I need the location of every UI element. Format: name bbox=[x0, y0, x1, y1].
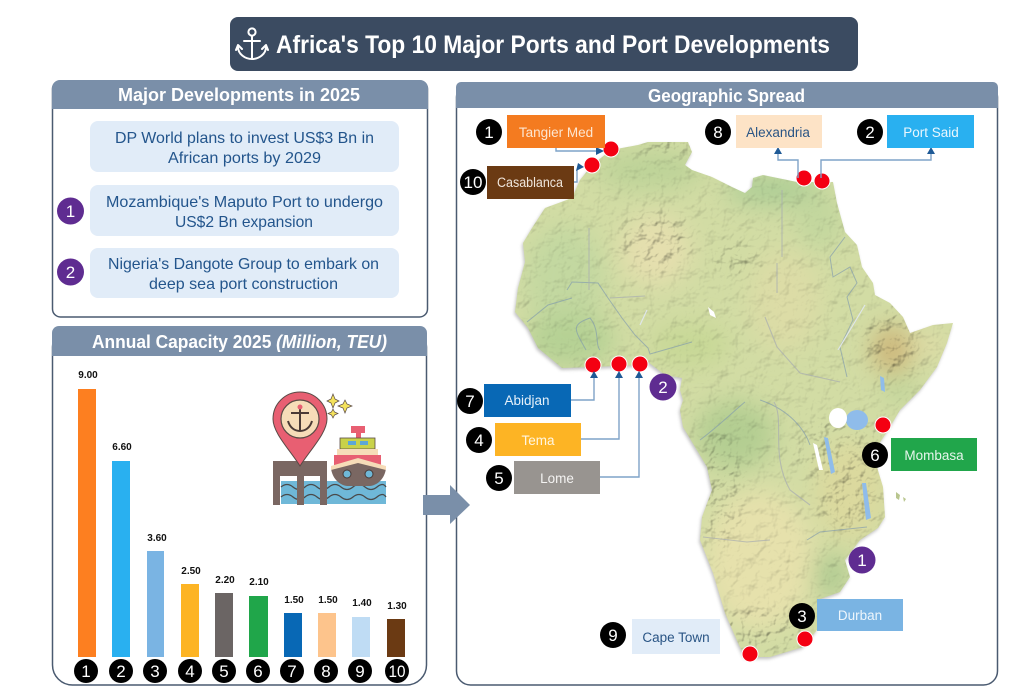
label: Port Said: 2 bbox=[865, 123, 875, 142]
panel: annual capacity bbox=[52, 326, 427, 685]
bar chart: 7 bbox=[287, 662, 297, 681]
bar chart: 2.10 bbox=[249, 577, 269, 588]
label: Abidjan: Abidjan bbox=[504, 393, 550, 408]
label: Alexandria: 8 bbox=[713, 123, 723, 142]
development marker 2: 2 bbox=[658, 378, 668, 397]
label: Port Said bbox=[857, 115, 974, 148]
bar chart: 8 bbox=[321, 662, 331, 681]
panel: geographic spread bbox=[456, 82, 998, 685]
development: Dangote: deep sea port construction bbox=[149, 276, 338, 293]
panel: annual capacity: Annual Capacity 2025 (Million, TEU) bbox=[92, 332, 387, 352]
bar chart: 4 bbox=[185, 662, 195, 681]
label: Alexandria bbox=[705, 115, 822, 148]
panel: major developments bbox=[52, 80, 428, 317]
bar chart: 5 bbox=[219, 662, 229, 681]
label: Tangier Med bbox=[476, 115, 605, 148]
bar chart: 10 bbox=[388, 662, 406, 681]
label: Cape Town bbox=[600, 619, 720, 654]
bar chart: 6.60 bbox=[112, 442, 132, 453]
connectors bbox=[556, 147, 935, 477]
label: Tangier Med: 1 bbox=[484, 123, 494, 142]
development marker 2 bbox=[650, 374, 676, 400]
bar chart: 1.30 bbox=[387, 601, 407, 612]
development: Maputo Port: Mozambique's Maputo Port to undergo bbox=[106, 194, 383, 211]
development: Maputo Port: US$2 Bn expansion bbox=[175, 214, 313, 231]
label: Abidjan bbox=[457, 384, 571, 417]
bar chart: 2.50 bbox=[181, 566, 201, 577]
label: Lome bbox=[486, 461, 600, 494]
bar chart bbox=[74, 370, 409, 683]
bar chart: 9.00 bbox=[78, 370, 98, 381]
label: Tangier Med: Tangier Med bbox=[519, 125, 593, 140]
label: Cape Town: Cape Town bbox=[642, 630, 710, 645]
panel: geographic spread: Geographic Spread bbox=[648, 86, 805, 106]
bar chart: 1.40 bbox=[352, 598, 372, 609]
bar chart: 1.50 bbox=[284, 595, 304, 606]
development marker 1: 1 bbox=[857, 551, 867, 570]
port markers bbox=[584, 141, 891, 662]
panel: major developments: Major Developments in 2025 bbox=[118, 85, 360, 105]
label: Lome: Lome bbox=[540, 471, 574, 486]
label: Mombasa: Mombasa bbox=[904, 448, 964, 463]
label: Abidjan: 7 bbox=[465, 392, 475, 411]
label: Casablanca bbox=[460, 166, 574, 199]
bar chart: 6 bbox=[253, 662, 263, 681]
development: Maputo Port: 1 bbox=[66, 202, 75, 221]
title bbox=[230, 17, 858, 71]
bar chart: 3.60 bbox=[147, 533, 167, 544]
development: Dangote: Nigeria's Dangote Group to embark on bbox=[108, 256, 379, 273]
bar chart: 1 bbox=[81, 662, 91, 681]
label: Mombasa bbox=[862, 438, 977, 471]
label: Durban bbox=[789, 599, 903, 631]
bar chart: 3 bbox=[150, 662, 160, 681]
development: DP World: African ports by 2029 bbox=[168, 150, 321, 167]
lakes bbox=[708, 307, 906, 520]
bar chart: 2 bbox=[116, 662, 126, 681]
label: Tema: 4 bbox=[474, 431, 484, 450]
development: Maputo Port bbox=[57, 185, 399, 236]
label: Durban: 3 bbox=[797, 607, 807, 626]
label: Lome: 5 bbox=[494, 469, 504, 488]
development: Dangote: 2 bbox=[66, 263, 75, 282]
label: Casablanca: Casablanca bbox=[497, 175, 563, 190]
bar chart: 1.50 bbox=[318, 595, 338, 606]
icon: port and ship bbox=[273, 392, 386, 505]
label: Port Said: Port Said bbox=[903, 125, 959, 140]
label: Mombasa: 6 bbox=[870, 446, 880, 465]
label: Alexandria: Alexandria bbox=[746, 125, 810, 140]
title: Africa's Top 10 Major Ports and Port Developments bbox=[276, 31, 830, 59]
bar chart: 9 bbox=[355, 662, 365, 681]
icon: anchor bbox=[236, 28, 268, 59]
arrow: capacity to map bbox=[423, 485, 470, 524]
label: Casablanca: 10 bbox=[464, 173, 482, 192]
label: Cape Town: 9 bbox=[608, 626, 618, 645]
label: Tema bbox=[466, 423, 581, 456]
label: Durban: Durban bbox=[838, 608, 882, 623]
development marker 1 bbox=[848, 546, 876, 574]
development: DP World: DP World plans to invest US$3 Bn in bbox=[115, 130, 374, 147]
development: Dangote bbox=[57, 248, 399, 298]
label: Tema: Tema bbox=[521, 433, 555, 448]
development: DP World bbox=[90, 121, 399, 172]
bar chart: 2.20 bbox=[215, 575, 235, 586]
map of Africa bbox=[500, 130, 970, 670]
